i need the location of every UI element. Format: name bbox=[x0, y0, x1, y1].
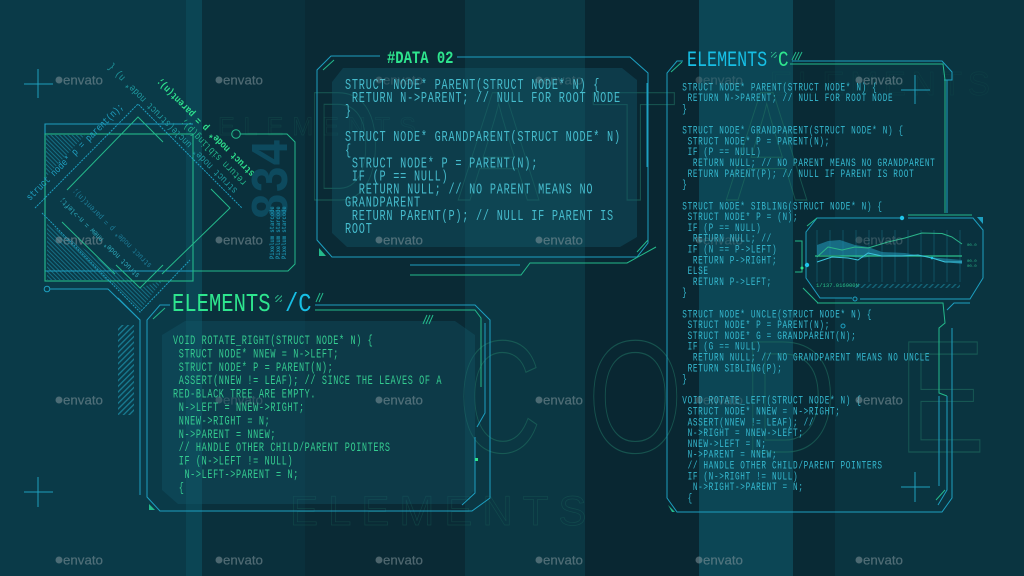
frame bbox=[667, 52, 970, 512]
code text: RETURN SIBLING(P); bbox=[682, 362, 783, 375]
code text: N->LEFT = NNEW->RIGHT; bbox=[173, 402, 305, 416]
code text: } bbox=[682, 103, 688, 115]
corner marker bbox=[668, 505, 675, 512]
envato watermarks: envato bbox=[543, 72, 583, 88]
code text: STRUCT NODE* NNEW = N->LEFT; bbox=[173, 348, 339, 362]
code text: RETURN PARENT(P); // NULL IF PARENT IS ROOT bbox=[682, 168, 914, 180]
tiny rotated captions: Pixelum starcode bbox=[269, 206, 276, 259]
code text: STRUCT NODE* P = PARENT(N); bbox=[345, 155, 538, 172]
envato watermarks: envato bbox=[223, 392, 263, 408]
code text: IF (P == NULL) bbox=[682, 222, 761, 234]
envato watermarks: envato bbox=[63, 232, 103, 248]
blue line series bbox=[817, 253, 962, 262]
code text: STRUCT NODE* G = GRANDPARENT(N); bbox=[682, 330, 856, 342]
envato watermarks: envato bbox=[543, 392, 583, 408]
heading: #DATA 02 bbox=[387, 48, 453, 69]
code text: STRUCT NODE* PARENT(STRUCT NODE* N) { bbox=[345, 76, 600, 94]
corner marker bbox=[977, 217, 983, 224]
code text: { bbox=[173, 482, 184, 496]
chart legends: 00.0 bbox=[967, 260, 977, 264]
chart legends bbox=[967, 244, 977, 269]
code text: ASSERT(NNEW != LEAF); // SINCE THE LEAVES OF A bbox=[173, 375, 442, 389]
chart legends: 00.0 bbox=[967, 265, 977, 269]
envato watermarks: envato bbox=[223, 72, 263, 88]
envato watermarks bbox=[56, 72, 903, 568]
green diamond bbox=[62, 117, 230, 288]
connector with ring: blue bbox=[44, 286, 140, 320]
code text: RETURN NULL; // NO GRANDPARENT MEANS NO UNCLE bbox=[682, 351, 930, 364]
code text: NNEW->LEFT = N; bbox=[682, 438, 767, 450]
envato watermarks: envato bbox=[543, 232, 583, 248]
code text: RETURN P->LEFT; bbox=[682, 276, 772, 288]
code text: N->PARENT = NNEW; bbox=[682, 448, 777, 461]
connector dots bbox=[800, 216, 904, 270]
code text bbox=[345, 76, 621, 237]
envato watermarks: envato bbox=[703, 392, 743, 408]
envato watermarks: envato bbox=[63, 392, 103, 408]
rotated code text: return sibling(p); bbox=[178, 116, 249, 188]
code text: N->RIGHT->PARENT = N; bbox=[682, 481, 804, 494]
code text: IF (P == NULL) bbox=[682, 146, 761, 159]
envato watermarks: envato bbox=[383, 392, 423, 408]
frame bbox=[317, 56, 656, 275]
rotated code text: struct node* p = parent(n); bbox=[24, 101, 126, 203]
rotated number 834: 834 bbox=[243, 139, 303, 220]
status dot bbox=[475, 458, 478, 461]
code text: // HANDLE OTHER CHILD/PARENT POINTERS bbox=[682, 459, 883, 472]
code text: { bbox=[345, 142, 352, 159]
envato watermarks: envato bbox=[863, 232, 903, 248]
tiny rotated captions bbox=[269, 206, 288, 259]
tiny rotated captions: Pixelum starcode bbox=[281, 206, 288, 259]
frame bbox=[118, 293, 490, 511]
caption hatch bar bbox=[855, 284, 960, 288]
inner panel fill bbox=[332, 68, 637, 247]
chart widget bbox=[795, 215, 983, 303]
heading: ELEMENTS bbox=[172, 291, 271, 320]
faint background lettering bbox=[218, 58, 996, 534]
connector with ring: green bbox=[193, 130, 295, 271]
code text: ASSERT(NNEW != LEAF); // bbox=[682, 416, 814, 429]
code text: } bbox=[682, 178, 688, 191]
code text: IF (N->RIGHT != NULL) bbox=[682, 470, 798, 483]
code text: STRUCT NODE* GRANDPARENT(STRUCT NODE* N) { bbox=[682, 124, 904, 137]
rotated code text bbox=[24, 61, 257, 279]
code text: STRUCT NODE* PARENT(STRUCT NODE* N) { bbox=[682, 81, 877, 94]
faint background lettering: O bbox=[588, 308, 683, 487]
data point bbox=[931, 257, 933, 259]
code text: NNEW->RIGHT = N; bbox=[173, 415, 270, 429]
code text bbox=[682, 81, 935, 504]
code text: RETURN N->PARENT; // NULL FOR ROOT NODE bbox=[682, 92, 893, 105]
heading: ELEMENTS bbox=[687, 48, 767, 73]
code text: N->RIGHT = NNEW->LEFT; bbox=[682, 427, 804, 440]
code text: // HANDLE OTHER CHILD/PARENT POINTERS bbox=[173, 442, 391, 456]
tiny rotated captions: Pixelum starcode bbox=[275, 206, 282, 259]
faint background lettering: C bbox=[458, 307, 541, 486]
code text: IF (N->LEFT != NULL) bbox=[173, 455, 293, 469]
faint background lettering: A bbox=[726, 58, 808, 233]
rotated code text: struct node* uncle(struct node* n) { bbox=[105, 61, 240, 196]
faint background lettering: D bbox=[306, 60, 380, 234]
faint background lettering: ELEMENTS bbox=[218, 113, 425, 141]
code text: RETURN NULL; // NO PARENT MEANS NO bbox=[345, 181, 593, 198]
envato watermarks: envato bbox=[223, 552, 263, 568]
crosshair markers bbox=[24, 69, 930, 507]
envato watermarks: envato bbox=[543, 552, 583, 568]
code text: } bbox=[682, 373, 688, 386]
code text: GRANDPARENT bbox=[345, 194, 421, 211]
chart legends: 00.0 bbox=[967, 244, 977, 248]
envato watermarks: envato bbox=[703, 552, 743, 568]
code text: { bbox=[682, 492, 693, 504]
code text: RETURN NULL; // bbox=[682, 232, 772, 245]
corner marker bbox=[319, 248, 326, 256]
code text: STRUCT NODE* SIBLING(STRUCT NODE* N) { bbox=[682, 200, 883, 213]
corner marker bbox=[149, 504, 155, 510]
faint background lettering: ELEMENTS bbox=[770, 65, 996, 102]
envato watermarks: envato bbox=[863, 72, 903, 88]
baseline bbox=[815, 255, 962, 257]
blue area series bbox=[817, 240, 962, 264]
code text: STRUCT NODE* GRANDPARENT(STRUCT NODE* N) bbox=[345, 128, 621, 146]
code text: STRUCT NODE* P = (N); bbox=[682, 211, 798, 224]
envato watermarks: envato bbox=[863, 552, 903, 568]
faint background lettering: ELEMENTS bbox=[290, 487, 596, 534]
code text: STRUCT NODE* P = PARENT(N); bbox=[682, 319, 830, 332]
code text: } bbox=[682, 286, 688, 299]
envato watermarks: envato bbox=[383, 232, 423, 248]
panel: elements C code listing bbox=[667, 47, 970, 512]
heading: C bbox=[778, 47, 789, 73]
code text: STRUCT NODE* UNCLE(STRUCT NODE* N) { bbox=[682, 308, 872, 321]
code text: STRUCT NODE* P = PARENT(N); bbox=[682, 135, 830, 148]
code text: N->LEFT->PARENT = N; bbox=[173, 469, 299, 483]
envato watermarks: envato bbox=[383, 552, 423, 568]
code text bbox=[173, 335, 442, 496]
widget body bbox=[806, 218, 983, 298]
code text: VOID ROTATE_RIGHT(STRUCT NODE* N) { bbox=[173, 335, 373, 349]
code text: N->PARENT = NNEW; bbox=[173, 428, 276, 442]
hatched corners bbox=[46, 135, 163, 310]
diagram: rotated code diamond bbox=[24, 61, 303, 320]
heading: /C bbox=[285, 291, 312, 320]
envato watermarks: envato bbox=[703, 72, 743, 88]
panel: rotate right bbox=[118, 291, 490, 511]
envato watermarks: envato bbox=[383, 72, 423, 88]
code text: RETURN P->RIGHT; bbox=[682, 254, 777, 267]
hatch block bbox=[118, 325, 134, 415]
code text: IF (P == NULL) bbox=[345, 168, 448, 185]
panel: data 02 bbox=[317, 48, 656, 275]
code text: RETURN PARENT(P); // NULL IF PARENT IS bbox=[345, 207, 614, 224]
grid lines bbox=[817, 230, 960, 282]
chart caption: 1/137.016900N bbox=[816, 282, 859, 289]
code text: RETURN N->PARENT; // NULL FOR ROOT NODE bbox=[345, 89, 621, 107]
code text: } bbox=[345, 102, 352, 120]
code text: RETURN NULL; // NO PARENT MEANS NO GRANDPARENT bbox=[682, 157, 935, 169]
code text: IF (N == P->LEFT) bbox=[682, 243, 777, 256]
code text: STRUCT NODE* P = PARENT(N); bbox=[173, 361, 333, 375]
envato watermarks: envato bbox=[63, 72, 103, 88]
code text: RED-BLACK TREE ARE EMPTY. bbox=[173, 388, 316, 402]
code text: STRUCT NODE* NNEW = N->RIGHT; bbox=[682, 405, 841, 418]
rotated code text: struct node* p = parent(n); bbox=[71, 186, 154, 269]
inner panel fill bbox=[162, 321, 475, 504]
green line series bbox=[817, 233, 962, 257]
envato watermarks: envato bbox=[703, 232, 743, 248]
square outlines bbox=[45, 124, 193, 281]
rotated code text: struct node* nnew = n->left; bbox=[58, 195, 142, 279]
faint background lettering: T bbox=[590, 58, 678, 233]
envato watermarks: envato bbox=[863, 392, 903, 408]
faint background lettering: A bbox=[458, 58, 540, 233]
envato watermarks: envato bbox=[63, 552, 103, 568]
dashed blue diamond bbox=[35, 104, 242, 312]
widget frame bbox=[795, 215, 983, 303]
faint background lettering: E bbox=[898, 309, 986, 487]
code text: ROOT bbox=[345, 220, 373, 237]
heading bbox=[172, 291, 312, 320]
code text: VOID ROTATE_LEFT(STRUCT NODE* N) { bbox=[682, 394, 862, 407]
faint background lettering: D bbox=[742, 309, 837, 487]
envato watermarks: envato bbox=[223, 232, 263, 248]
code text: IF (G == NULL) bbox=[682, 340, 761, 353]
code text: ELSE bbox=[682, 265, 709, 278]
rotated code text: struct node* p = parent(n); bbox=[154, 76, 257, 179]
